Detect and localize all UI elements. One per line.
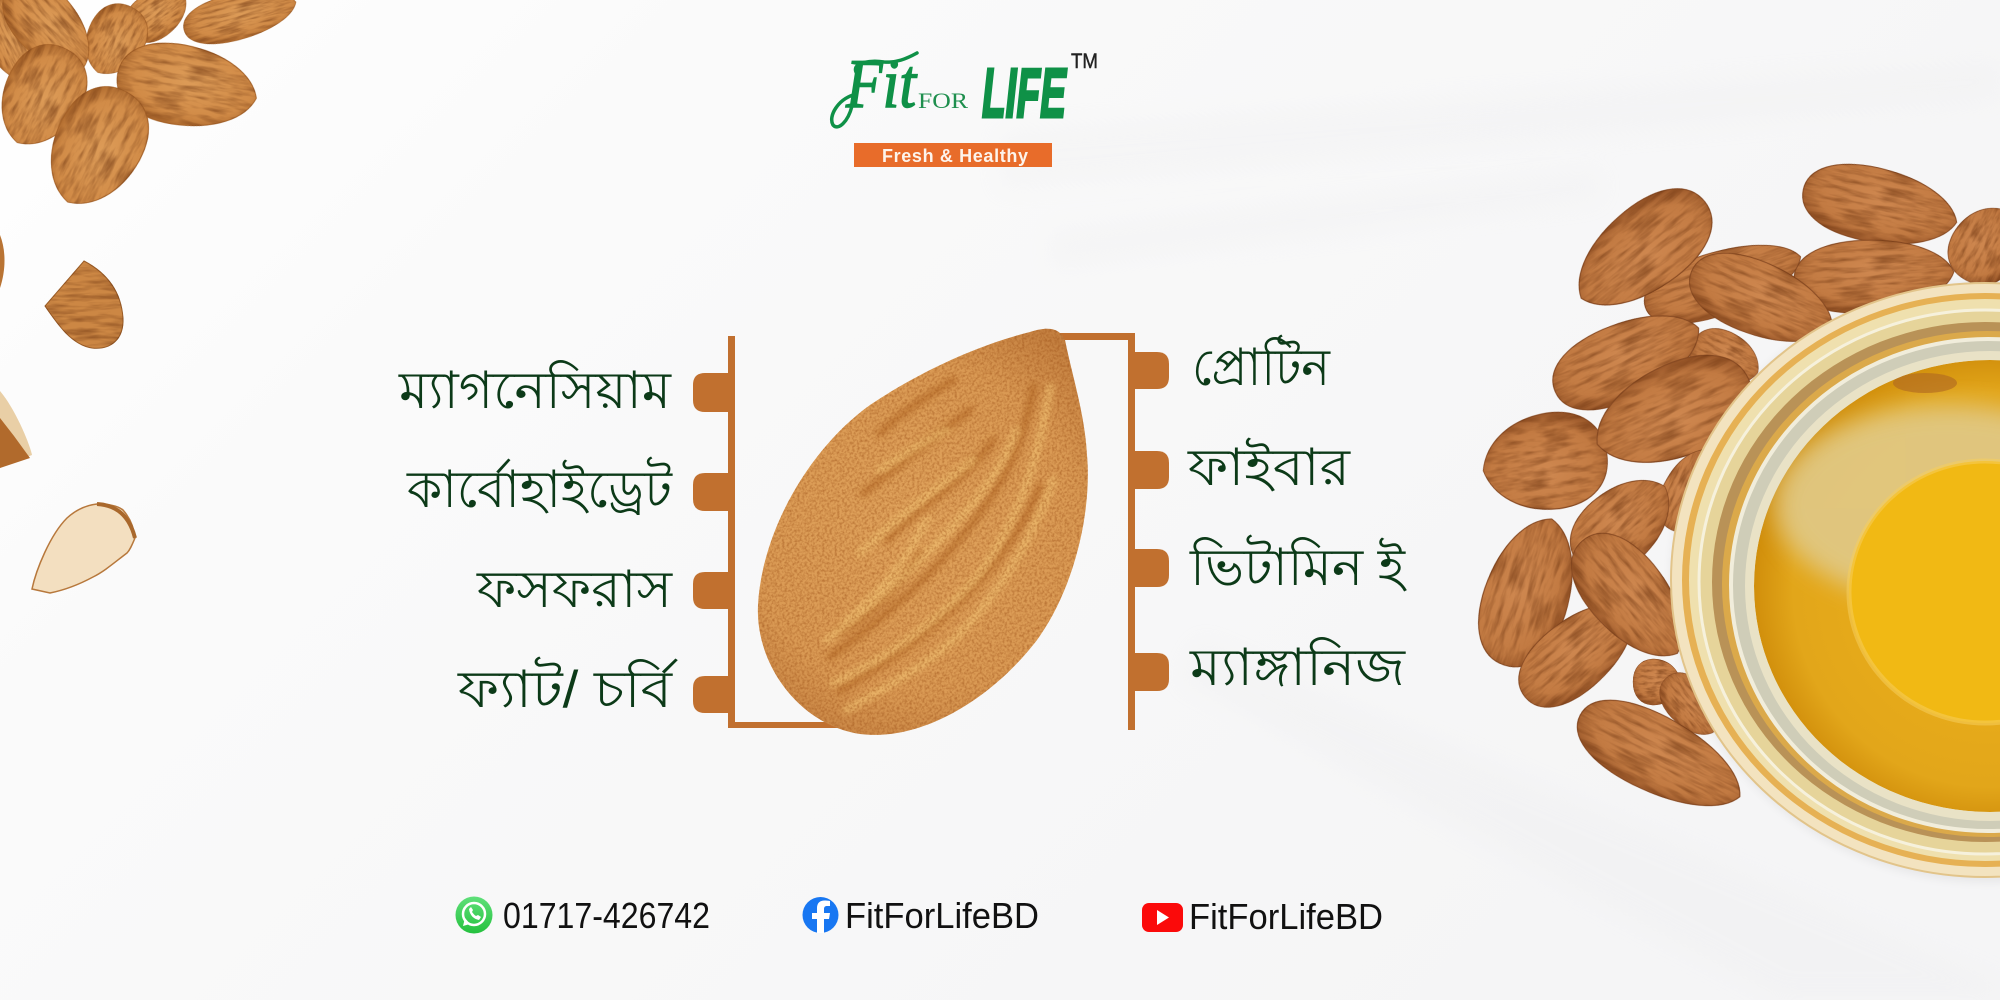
logo word: LIFE: LIFE — [982, 54, 1067, 132]
right bracket — [1050, 333, 1135, 730]
footer contacts — [456, 895, 1383, 937]
nutrient labels: right: ভিটামিন ই — [1189, 535, 1407, 597]
almond sliver at left edge — [0, 235, 4, 288]
nutrient labels: right — [1187, 335, 1407, 697]
facebook handle: FitForLifeBD — [845, 895, 1039, 936]
phone number: 01717-426742 — [503, 895, 710, 936]
tagline bar: Fresh & Healthy — [882, 146, 1028, 166]
nutrient labels: right: ম্যাঙ্গানিজ — [1189, 637, 1407, 697]
logo word: FOR: FOR — [918, 88, 968, 113]
nutrient labels: left: ফসফরাস — [476, 561, 674, 619]
cut almond piece — [0, 391, 32, 468]
nutrient labels: left: ম্যাগনেসিয়াম — [398, 360, 672, 420]
right tabs — [1134, 352, 1169, 691]
left bracket — [728, 336, 840, 728]
oil surface — [1754, 360, 2000, 812]
logo — [832, 46, 1098, 167]
oil bowl — [1671, 282, 2000, 882]
almonds: right cluster — [1464, 154, 2000, 830]
almond slice — [32, 504, 135, 593]
icon: facebook — [802, 897, 838, 933]
central almond — [758, 328, 1088, 735]
left tabs — [693, 373, 729, 713]
icon: whatsapp — [456, 896, 492, 934]
lemon-shaped light reflection — [1849, 461, 2000, 723]
almond piece — [45, 261, 123, 348]
youtube handle: FitForLifeBD — [1189, 896, 1383, 937]
nutrient labels: left — [398, 360, 678, 719]
tagline bar — [854, 143, 1052, 167]
logo script: Fit: Fit — [845, 46, 917, 123]
trademark: TM — [1071, 50, 1098, 73]
icon: youtube — [1142, 903, 1183, 932]
nutrient labels: right: ফাইবার — [1187, 438, 1351, 497]
nutrient labels: left: কার্বোহাইড্রেট — [406, 457, 674, 519]
nutrient labels: right: প্রোটিন — [1192, 335, 1331, 397]
diagram bracket and tabs — [693, 333, 1169, 730]
nutrient labels: left: ফ্যাট/ চর্বি — [457, 657, 678, 719]
almonds: top-left scatter — [0, 0, 301, 593]
